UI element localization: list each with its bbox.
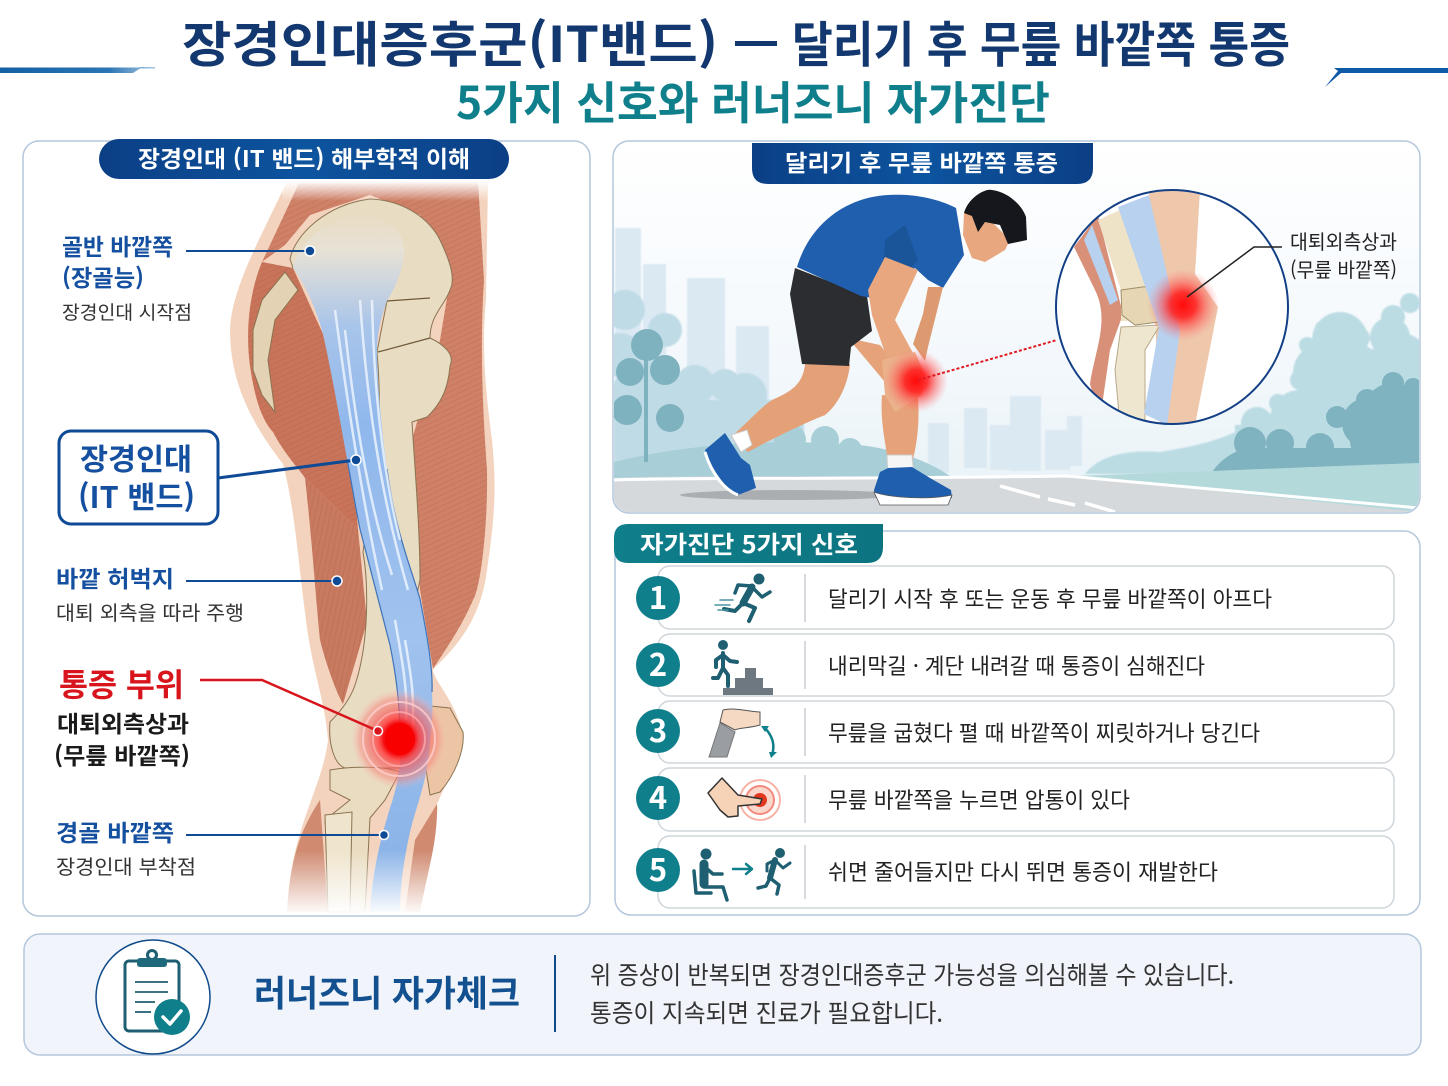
- heading tab: runner: 달리기 후 무릎 바깥쪽 통증: [785, 144, 1058, 178]
- illustration: runner holding knee: [705, 190, 1027, 505]
- row 5: 5: [649, 845, 667, 890]
- text: self check advice: 통증이 지속되면 진료가 필요합니다.: [590, 994, 943, 1030]
- heading tab: 5 signs: 자가진단 5가지 신호: [640, 525, 858, 560]
- label: inset knee: (무릎 바깥쪽): [1290, 254, 1397, 283]
- icon: rest then run: [694, 848, 790, 900]
- title: [182, 6, 1290, 77]
- icon: pressing finger: [708, 778, 780, 820]
- subtitle: 5가지 신호와 러너즈니 자가진단: [456, 67, 1050, 132]
- callout box: IT band: 장경인대: [80, 435, 192, 479]
- icon: clipboard: [96, 940, 210, 1054]
- row 4: 무릎 바깥쪽을 누르면 압통이 있다: [828, 783, 1130, 815]
- label: outer thigh: [56, 560, 342, 626]
- label: outer thigh: 대퇴 외측을 따라 주행: [56, 597, 244, 626]
- label: tibia: 장경인대 부착점: [56, 851, 196, 880]
- label: pelvis: 장경인대 시작점: [62, 298, 192, 325]
- icon: runner: [715, 574, 770, 621]
- row 3: [636, 701, 1394, 763]
- heading pill: anatomy: [99, 139, 509, 179]
- heading tab: 5 signs: [614, 524, 883, 563]
- row 4: [636, 768, 1394, 831]
- row 1: 달리기 시작 후 또는 운동 후 무릎 바깥쪽이 아프다: [828, 582, 1272, 614]
- text: self check advice: 위 증상이 반복되면 장경인대증후군 가능성을 의심해볼 수 있습니다.: [590, 956, 1234, 992]
- row 2: 내리막길 · 계단 내려갈 때 통증이 심해진다: [828, 649, 1205, 681]
- label: pelvis: (장골능): [62, 259, 144, 293]
- fades: [282, 850, 442, 915]
- bones: [290, 199, 452, 768]
- row 3: 무릎을 굽혔다 펼 때 바깥쪽이 찌릿하거나 당긴다: [828, 716, 1260, 748]
- header decoration right: [1325, 68, 1448, 87]
- IT band: [293, 215, 432, 912]
- label: pain site: 통증 부위: [59, 660, 184, 706]
- row 5: 쉬면 줄어들지만 다시 뛰면 통증이 재발한다: [828, 855, 1218, 887]
- row 1: 1: [649, 573, 667, 618]
- label: inset knee: 대퇴외측상과: [1290, 226, 1397, 255]
- label: pain site: 대퇴외측상과: [57, 705, 189, 739]
- row 5: [636, 836, 1394, 908]
- label: inset knee: [1187, 226, 1397, 297]
- label: pelvis: [62, 228, 315, 325]
- heading tab: runner: [752, 143, 1093, 184]
- title: 장경인대증후군(IT밴드): [182, 6, 718, 77]
- panel: runner's knee self check: [24, 934, 1421, 1055]
- illustration: background city and park: [614, 227, 1419, 512]
- panel: self-check 5 signs: [614, 524, 1420, 915]
- row 2: [636, 634, 1394, 696]
- panel: anatomy: [23, 139, 590, 916]
- dotted connector: [918, 340, 1057, 380]
- muscles: [248, 262, 358, 529]
- heading: self check: 러너즈니 자가체크: [254, 965, 520, 1017]
- row 4: 4: [649, 773, 667, 818]
- label: tibia: 경골 바깥쪽: [56, 814, 174, 848]
- label: outer thigh: 바깥 허벅지: [56, 560, 174, 594]
- label: tibia: [56, 814, 388, 880]
- title: 달리기 후 무릎 바깥쪽 통증: [792, 6, 1290, 77]
- callout box: IT band: (IT 밴드): [78, 473, 195, 517]
- panel: runner scene: [598, 141, 1442, 513]
- row 2: 2: [649, 640, 667, 685]
- illustration: leg anatomy: [230, 181, 495, 915]
- label: pelvis: 골반 바깥쪽: [62, 228, 173, 262]
- icon: stairs: [713, 640, 773, 695]
- callout box: IT band: [59, 431, 361, 524]
- label: pain site: [54, 660, 382, 771]
- icon: bent knee: [709, 709, 777, 758]
- header decoration left: [0, 67, 155, 73]
- text: self check advice: [590, 956, 1234, 1030]
- row 1: [636, 566, 1394, 629]
- inset: knee close-up: [1056, 190, 1288, 425]
- row 3: 3: [649, 706, 667, 751]
- label: pain site: (무릎 바깥쪽): [54, 737, 190, 771]
- heading pill: anatomy: 장경인대 (IT 밴드) 해부학적 이해: [138, 140, 470, 174]
- pain spot: [351, 689, 447, 789]
